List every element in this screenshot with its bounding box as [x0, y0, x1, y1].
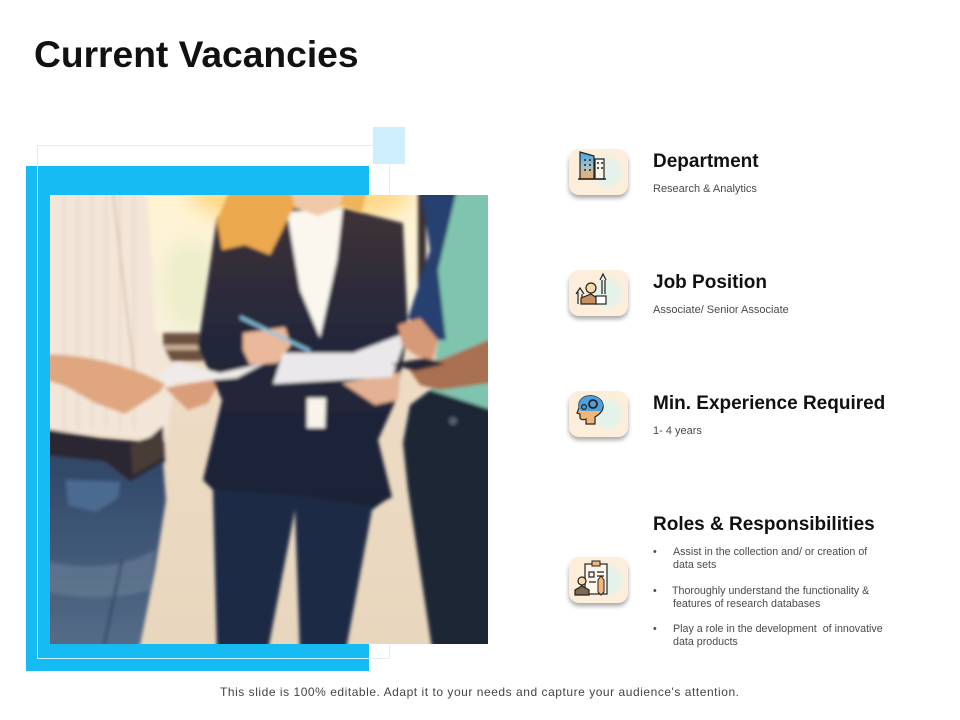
left person forearm and hand [40, 354, 165, 414]
heading: Job Position [653, 272, 767, 293]
lower hand under paper [342, 372, 400, 405]
detail text: Associate/ Senior Associate [653, 304, 789, 316]
row: job position [569, 270, 789, 319]
right person jacket [408, 185, 458, 340]
icon tile: buildings [569, 149, 628, 198]
bullet 2: • [653, 585, 657, 597]
paper right [273, 332, 408, 384]
thin outline frame [38, 146, 390, 658]
bullet list [653, 546, 883, 648]
bullet 1: data sets [673, 559, 716, 571]
bullet 3: data products [673, 636, 738, 648]
phone hand [408, 338, 488, 392]
bullet 1: • [653, 546, 657, 558]
row: roles and responsibilities [569, 514, 883, 648]
photo: three colleagues reviewing documents [50, 195, 488, 644]
phone [391, 358, 445, 371]
bullet 3: • [653, 623, 657, 635]
heading: Min. Experience Required [653, 393, 885, 414]
pen [240, 317, 310, 351]
panel: photo with blue frame [26, 127, 498, 671]
bullet 2: features of research databases [673, 598, 820, 610]
right person teal shirt [429, 195, 488, 412]
icon tile: clipboard, person and pencil [569, 557, 628, 606]
detail text: 1- 4 years [653, 425, 702, 437]
bullet 1: Assist in the collection and/ or creation of [673, 546, 867, 558]
left person shirt [50, 195, 174, 442]
pointing hand [398, 318, 438, 362]
footer note: This slide is 100% editable. Adapt it to your needs and capture your audience's attention. [220, 685, 739, 699]
row: department [569, 149, 759, 198]
icon tile: person with arrows and briefcase [569, 270, 628, 319]
detail text: Research & Analytics [653, 183, 757, 195]
left person jeans [40, 455, 166, 655]
pale blue accent square [373, 127, 405, 164]
middle person neck [289, 195, 344, 218]
icon tile: head with gears [569, 391, 628, 440]
left person belt [40, 426, 165, 482]
solid blue backing rectangle [26, 166, 369, 671]
title: Current Vacancies [34, 33, 359, 75]
right person trousers and jacket hem [400, 388, 488, 644]
row: minimum experience [569, 391, 885, 440]
middle person blazer [198, 208, 408, 507]
paper left [158, 362, 265, 384]
middle person trousers [213, 490, 390, 655]
pen hand [243, 327, 291, 365]
heading: Department [653, 151, 759, 172]
middle person hair [217, 185, 295, 255]
bullet 2: Thoroughly understand the functionality & [672, 585, 869, 597]
frame line over blue [38, 166, 369, 658]
middle person shirt [287, 208, 343, 338]
heading: Roles & Responsibilities [653, 514, 875, 535]
bullet 3: Play a role in the development of innovative [673, 623, 883, 635]
